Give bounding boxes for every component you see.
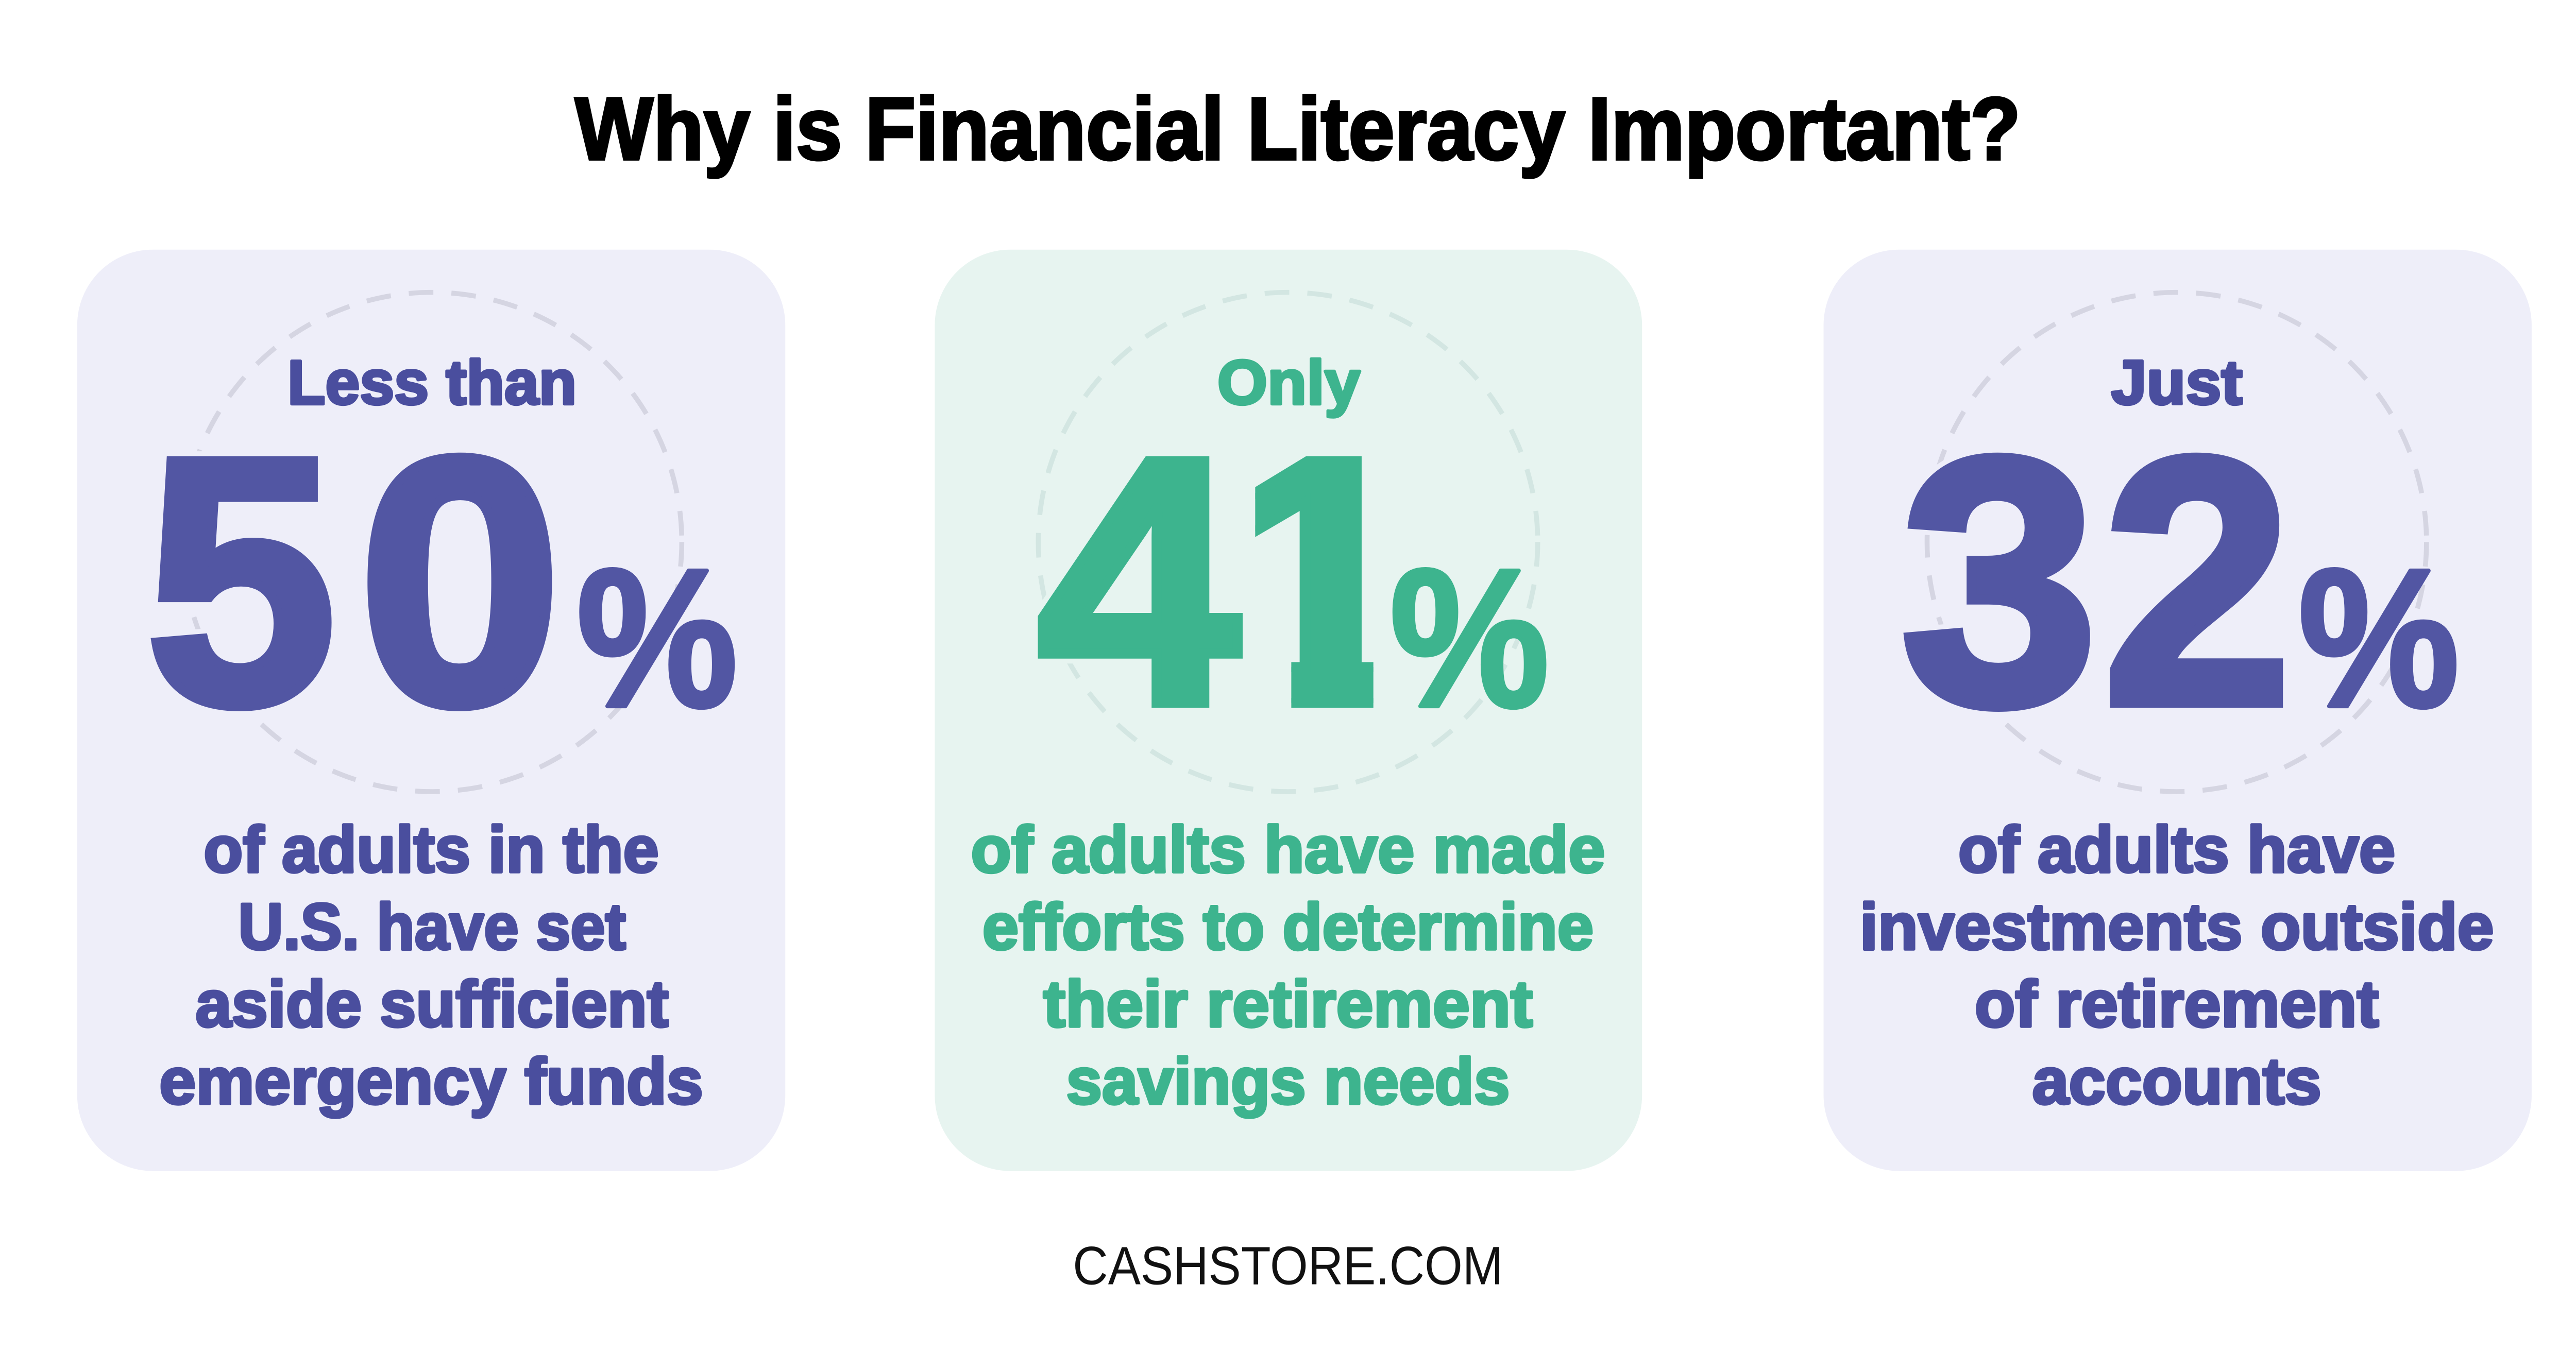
card background — [77, 250, 785, 1171]
description: emergency funds — [159, 1045, 703, 1118]
big number — [1901, 385, 2292, 778]
big number halo: 4 — [1038, 385, 1242, 778]
description: U.S. have set — [238, 891, 626, 964]
big number: 4 — [1038, 385, 1242, 778]
big number: 3 — [1901, 385, 2098, 778]
dashed circle — [182, 293, 682, 792]
big number: 5 — [146, 385, 336, 778]
lead text: Less than — [287, 347, 577, 417]
big number halo — [146, 385, 562, 778]
big number halo: 3 — [1901, 385, 2098, 778]
card background — [935, 250, 1642, 1171]
lead text: Just — [2111, 347, 2243, 417]
description: aside sufficient — [195, 968, 669, 1041]
description: savings needs — [1066, 1045, 1510, 1118]
description: accounts — [2032, 1045, 2321, 1118]
description — [159, 813, 703, 1118]
card background — [1824, 250, 2532, 1171]
description: of retirement — [1975, 968, 2379, 1041]
big number: 1 — [1217, 385, 1426, 778]
description — [971, 813, 1605, 1118]
percent sign: % — [2298, 528, 2460, 748]
lead text: Only — [1217, 347, 1360, 417]
title: Why is Financial Literacy Important? — [575, 79, 2021, 178]
description: of adults have made — [971, 813, 1605, 886]
footer source: CASHSTORE.COM — [1073, 1236, 1503, 1296]
dashed circle — [1927, 293, 2427, 792]
description: efforts to determine — [982, 891, 1594, 964]
panel: emergency funds — [77, 250, 785, 1171]
dashed circle — [1038, 293, 1538, 792]
description: their retirement — [1043, 968, 1533, 1041]
big number halo — [1901, 385, 2292, 778]
big number halo: 0 — [358, 385, 562, 778]
big number — [146, 385, 562, 778]
big number halo: 2 — [2103, 385, 2292, 778]
big number: 0 — [358, 385, 562, 778]
description: investments outside — [1860, 891, 2494, 964]
big number: 2 — [2103, 385, 2292, 778]
description — [1860, 813, 2494, 1118]
big number halo: 5 — [146, 385, 336, 778]
description: of adults in the — [204, 813, 659, 886]
description: of adults have — [1958, 813, 2395, 886]
big number — [1038, 456, 1374, 708]
percent sign: % — [577, 528, 738, 748]
percent sign: % — [1390, 528, 1549, 748]
panel: investments — [1824, 250, 2532, 1171]
panel: retirement savings — [935, 250, 1642, 1171]
